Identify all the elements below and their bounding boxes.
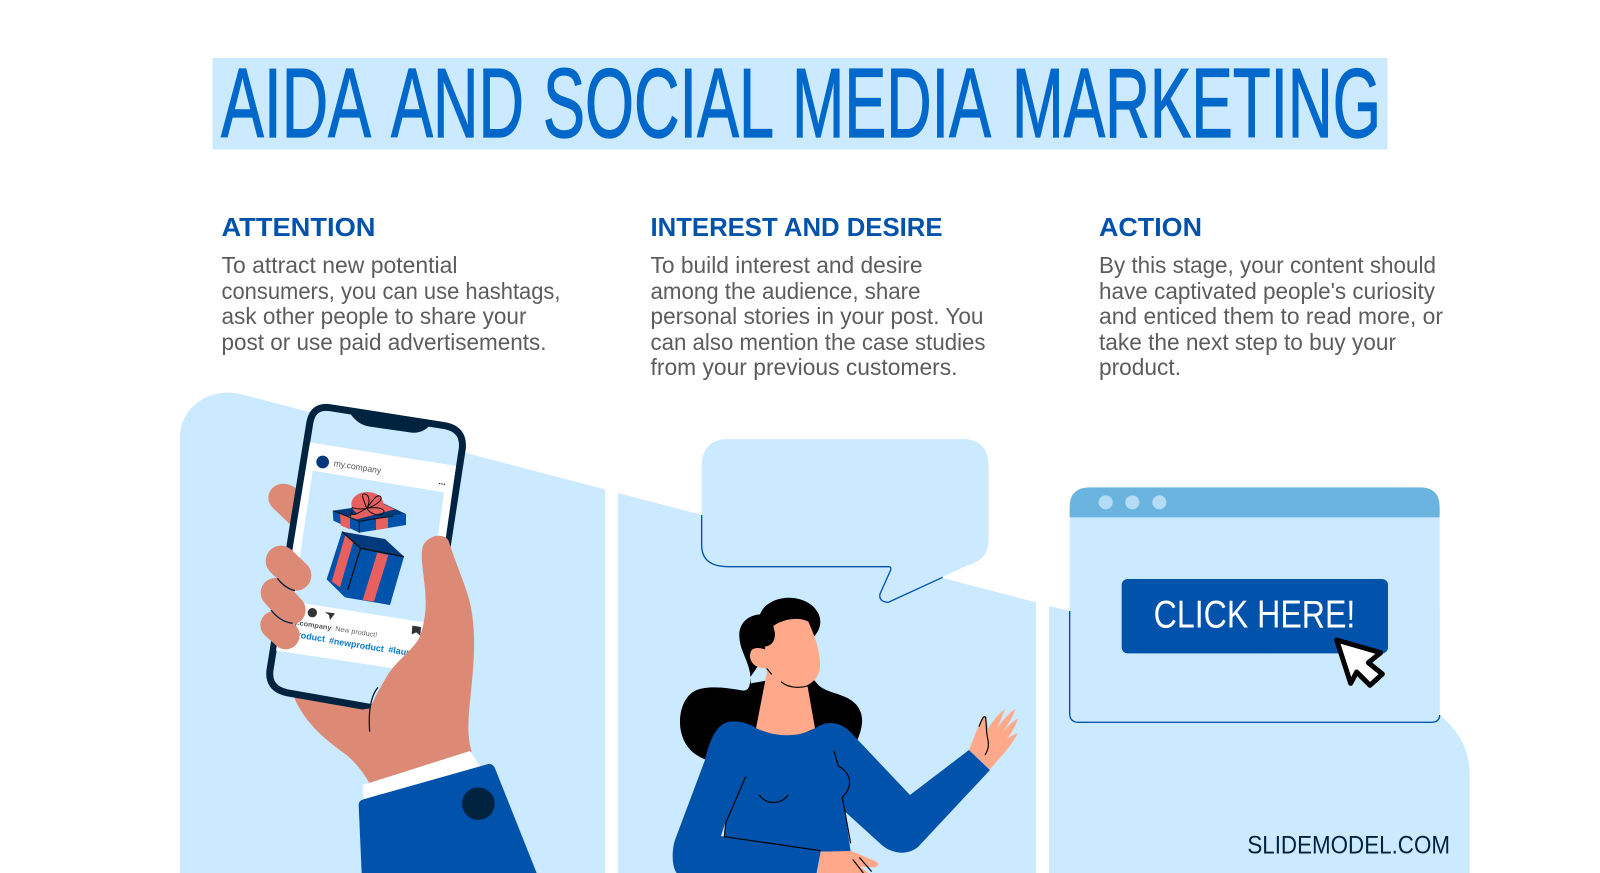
sleeve gap (721, 823, 725, 837)
title: MEDIA (792, 48, 991, 158)
finger creases (271, 578, 378, 732)
panel: browser with click here button (1049, 487, 1470, 873)
face (765, 619, 820, 688)
hand back and index finger (268, 484, 403, 783)
panel: phone in hand illustration (180, 393, 605, 873)
background shape (180, 393, 605, 873)
phone (270, 407, 462, 713)
menu dots: ... (438, 476, 447, 487)
window dots (1099, 495, 1166, 509)
title: SOCIAL (543, 48, 774, 158)
post caption: my.company (287, 618, 332, 632)
phone: #newproduct (328, 635, 385, 654)
raised hand (969, 708, 1018, 769)
gift bow (351, 492, 383, 516)
column: action (1099, 212, 1443, 380)
text: attention body (222, 252, 560, 355)
phone: New product! (335, 626, 378, 639)
ear (750, 648, 767, 668)
phone: #launch (388, 644, 423, 660)
panel: woman with speech bubble (618, 439, 1036, 873)
website label: SLIDEMODEL.COM (1247, 831, 1450, 859)
text: action body: and enticed them to read more, or (1099, 303, 1443, 329)
text: interest body: personal stories in your post. You (650, 303, 984, 329)
post card (276, 442, 456, 673)
text: interest body: from your previous customers. (650, 354, 958, 380)
title (212, 48, 1388, 158)
jacket sleeve (359, 764, 537, 873)
text: action body: take the next step to buy your (1099, 329, 1396, 355)
heading: interest and desire: INTEREST AND DESIRE (650, 212, 942, 242)
fingers (274, 561, 296, 635)
background shape (1049, 606, 1470, 873)
cursor (1337, 640, 1382, 685)
text: action body: product. (1099, 354, 1181, 380)
text: interest body: among the audience, share (650, 278, 920, 304)
text: action body (1099, 252, 1443, 380)
column: attention (222, 212, 560, 355)
text: attention body: ask other people to share your (222, 303, 527, 329)
post hashtags: #product (286, 628, 326, 644)
avatar (316, 456, 329, 468)
heading: attention: ATTENTION (222, 212, 376, 242)
button (1122, 579, 1388, 653)
speech bubble (702, 439, 989, 602)
account name: my.company (333, 458, 383, 476)
woman (673, 598, 1018, 873)
text: interest body: can also mention the case studies (650, 329, 986, 355)
sleeve button (462, 787, 495, 820)
column: interest and desire (650, 212, 986, 380)
post image (293, 471, 444, 623)
lower hand (817, 851, 878, 873)
text: attention body: To attract new potential (222, 252, 458, 278)
text: action body: have captivated people's curiosity (1099, 278, 1435, 304)
top with arm (673, 721, 990, 873)
text: attention body: post or use paid advertisements. (222, 329, 546, 355)
button: CLICK HERE! (1154, 593, 1355, 636)
gift lid (333, 492, 406, 533)
gift box (327, 532, 404, 605)
heading: action: ACTION (1099, 212, 1202, 242)
hair (680, 598, 862, 760)
title: AIDA (221, 48, 371, 158)
title bar (1070, 487, 1440, 517)
text: action body: By this stage, your content should (1099, 252, 1436, 278)
title: AND (391, 48, 524, 158)
thumb and palm (337, 536, 474, 784)
neck (756, 670, 815, 742)
notch (348, 411, 430, 433)
text: interest body: To build interest and desire (650, 252, 922, 278)
browser window (1070, 487, 1440, 722)
title: MARKETING (1012, 48, 1381, 158)
text: attention body: consumers, you can use hashtags, (222, 278, 560, 304)
background shape (618, 493, 1036, 873)
text: interest body (650, 252, 986, 380)
body lines (724, 668, 988, 873)
shirt cuff (363, 751, 481, 799)
post icons (308, 608, 421, 636)
